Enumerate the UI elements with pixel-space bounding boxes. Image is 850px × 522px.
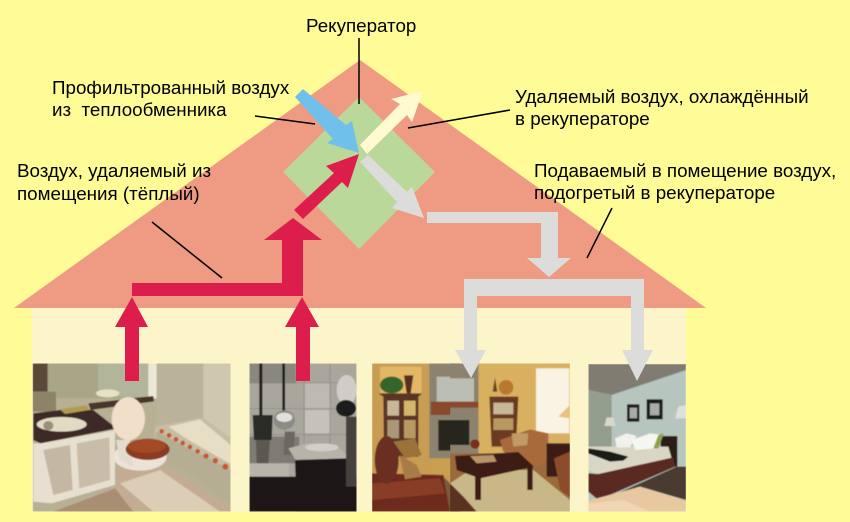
- label: recuperator: Рекуператор: [306, 15, 416, 36]
- arrow: warm air into recuperator: [294, 154, 359, 219]
- arrow: cooled exhaust air: [360, 91, 423, 154]
- arrow: heated supply air: [360, 155, 424, 218]
- leader line: warm air: [152, 222, 222, 278]
- house wall: [32, 306, 686, 512]
- label: filtered air: Профильтрованный воздух: [52, 77, 290, 98]
- photo: kitchen: [249, 363, 357, 512]
- label: filtered air: из теплообменника: [52, 99, 227, 120]
- leader line: cooled exhaust: [408, 110, 510, 128]
- label: heated supply air: Подаваемый в помещение воздух,: [534, 160, 836, 181]
- roof: [14, 60, 706, 308]
- label: warm exhaust air: Воздух, удаляемый из: [17, 160, 211, 181]
- arrow: exhaust air from bathroom: [115, 297, 148, 381]
- supply duct: upper with downward arrow: [427, 212, 571, 277]
- photo: living room: [372, 363, 570, 512]
- recuperator diamond: [283, 97, 435, 249]
- photo: bathroom: [33, 363, 231, 512]
- arrow: filtered air from outside: [295, 89, 359, 153]
- leader line: heated supply: [587, 208, 612, 258]
- leader line: filtered air: [255, 116, 315, 124]
- label: cooled exhaust air: в рекуператоре: [515, 108, 650, 129]
- label: warm exhaust air: помещения (тёплый): [17, 183, 200, 204]
- label: heated supply air: подогретый в рекуператоре: [534, 182, 775, 203]
- label: cooled exhaust air: Удаляемый воздух, охлаждённый: [515, 86, 809, 107]
- arrow: exhaust air from kitchen: [285, 297, 319, 381]
- leader line: recuperator: [358, 38, 360, 104]
- supply duct: branch with two downward arrows: [455, 279, 653, 381]
- photo: bedroom: [588, 364, 686, 512]
- exhaust duct: horizontal and upward arrow: [132, 218, 322, 296]
